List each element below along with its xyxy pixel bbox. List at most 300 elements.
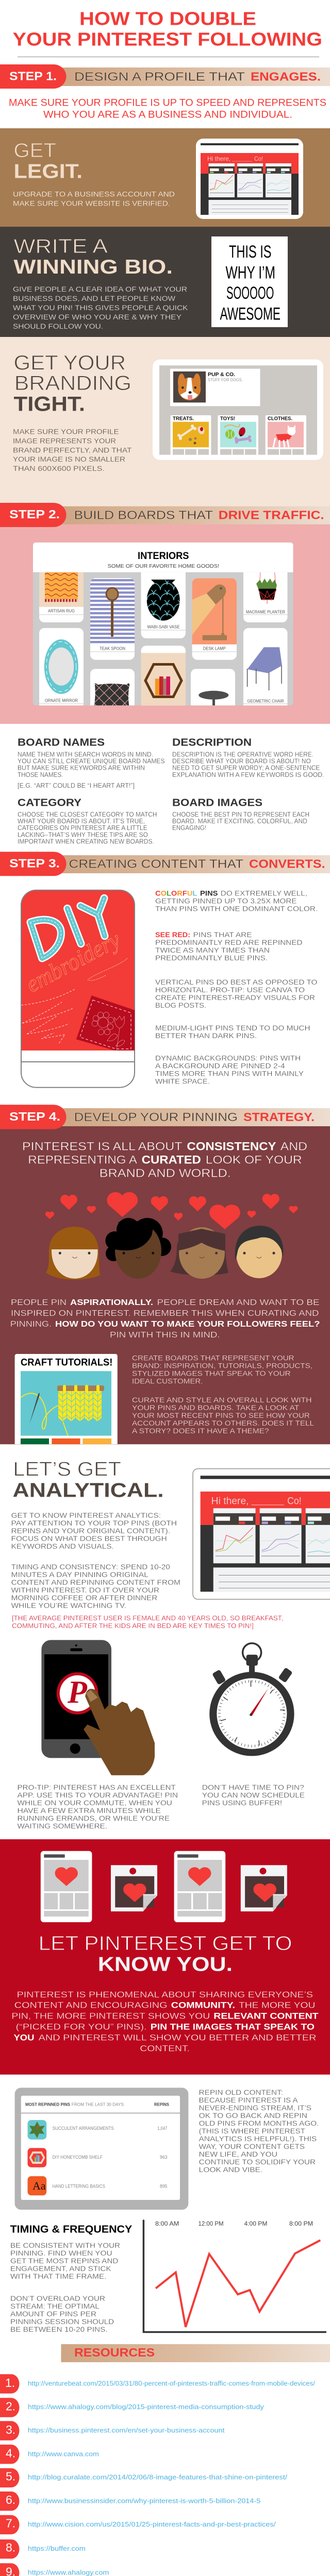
text block: board images: BOARD IMAGES	[172, 797, 262, 808]
text: pin aspirationally	[10, 1298, 320, 1340]
tablet: most repinned pins table: REPINS	[154, 2102, 169, 2107]
text: bio body: SHOULD FOLLOW YOU.	[13, 322, 103, 330]
text: pin tips	[155, 889, 318, 1085]
board mockup: interiors: SOME OF OUR FAVORITE HOME GOODS!	[108, 563, 219, 569]
icon: pinned note 1	[111, 1865, 157, 1911]
pin: stool	[191, 669, 235, 706]
poster: this is why i'm sooooo awesome: THIS IS	[229, 242, 271, 262]
board: clothes: CLOTHES.	[268, 416, 292, 422]
poster: this is why i'm sooooo awesome: WHY I’M	[226, 263, 275, 282]
tablet: most repinned pins table: FROM THE LAST 30 DAYS	[72, 2102, 124, 2107]
row: diy honeycomb shelf	[28, 2148, 167, 2167]
text: create boards	[132, 1354, 312, 1385]
text: red note: COMMUTING, AND AFTER THE KIDS ARE IN BED ARE KEY TIMES TO PIN!]	[12, 1622, 254, 1630]
text: get legit body: UPGRADE TO A BUSINESS ACCOUNT AND	[13, 190, 175, 198]
heading: let pinterest get to know you: KNOW YOU.	[98, 1954, 233, 1976]
resource 3	[0, 2421, 225, 2441]
text: consistency statement: CURATED	[142, 1154, 201, 1166]
step 1 intro text	[9, 97, 326, 121]
resource 7: http://www.cision.com/us/2015/01/25-pinterest-facts-and-pr-best-practices/	[28, 2521, 276, 2528]
tip: see red: SEE RED:	[155, 930, 190, 939]
panel: interiors board background	[0, 524, 330, 731]
board: toys: TOYS!	[220, 416, 235, 422]
text: timing and consistency: CONTENT AND REPINNING CONTENT FROM	[11, 1578, 180, 1586]
row: hand lettering basics: Aa	[32, 2179, 46, 2192]
heading: let's get analytical: ANALYTICAL.	[12, 1479, 164, 1501]
text: bio body: BUSINESS DOES, AND LET PEOPLE KNOW	[13, 294, 176, 302]
text: community paragraph	[11, 1990, 319, 2053]
resources banner: RESOURCES	[74, 2346, 155, 2359]
board mockup: interiors	[33, 543, 293, 706]
icon: tablet with heart 2	[174, 1851, 225, 1922]
resource 4: http://www.canva.com	[28, 2450, 99, 2458]
tip: see red: PINS THAT ARE	[193, 930, 252, 939]
step 3 banner: CONVERTS.	[249, 857, 325, 871]
text: red note	[12, 1614, 283, 1630]
pin: ornate mirror: ORNATE MIRROR	[45, 698, 78, 703]
text: repin old content	[199, 2088, 319, 2174]
text block: board names: YOU CAN STILL CREATE UNIQUE BOARD NAMES	[18, 757, 165, 765]
pin: macrame planter	[243, 572, 288, 622]
text: pro-tip	[18, 1783, 178, 1830]
step 2 banner: DRIVE TRAFFIC.	[219, 508, 324, 521]
text block: category: WHAT YOUR BOARD IS ABOUT. IT’S TRUE,	[18, 818, 145, 825]
text block: board names: THOSE NAMES.	[18, 771, 63, 778]
resource 5: http://blog.curalate.com/2014/02/06/8-image-features-that-shine-on-pinterest/	[28, 2473, 288, 2481]
text: consistency statement: REPRESENTING A	[28, 1154, 137, 1166]
resource 3: 3.	[6, 2423, 15, 2436]
text: community paragraph: PIN THE IMAGES THAT SPEAK TO	[151, 2022, 315, 2031]
step 4 banner: STRATEGY.	[243, 1110, 315, 1124]
text: analytics	[11, 1511, 177, 1550]
text: community paragraph: CONTENT.	[140, 2043, 190, 2053]
text: consistency statement: LOOK OF YOUR	[206, 1154, 302, 1166]
heading: winning bio: WINNING BIO.	[13, 256, 173, 278]
text: pro-tip: PRO-TIP: PINTEREST HAS AN EXCELLENT	[18, 1783, 176, 1791]
text block: category	[18, 797, 157, 845]
tip: dynamic backgrounds: DYNAMIC BACKGROUNDS: PINS WITH	[155, 1054, 301, 1062]
resource 2	[0, 2398, 265, 2417]
pin: macrame planter: MACRAME PLANTER	[246, 609, 285, 614]
text: repin old content: (THIS IS WHERE PINTEREST	[199, 2127, 305, 2135]
text: repin old content: NEW LIFE, AND YOU	[199, 2150, 277, 2158]
tablet: most repinned pins table	[15, 2088, 188, 2210]
text: pro-tip: WAITING SOMEWHERE.	[18, 1822, 107, 1830]
tip: colorful pins	[155, 889, 318, 913]
icon: large analytics dashboard: Hi there,	[211, 1495, 249, 1506]
resource 8	[0, 2539, 86, 2558]
title: YOUR PINTEREST FOLLOWING	[12, 28, 322, 49]
tip: colorful pins: COLORFUL	[155, 889, 197, 897]
text: get legit body: MAKE SURE YOUR WEBSITE IS VERIFIED.	[13, 199, 170, 207]
text block: board names: BOARD NAMES	[18, 737, 105, 749]
tip: colorful pins: DO EXTREMELY WELL,	[221, 889, 307, 897]
icon: analytics dashboard tablet: Co!	[254, 155, 263, 162]
text: pro-tip: HAVE A FEW EXTRA MINUTES WHILE	[18, 1806, 161, 1815]
pin: ornate mirror	[39, 628, 84, 711]
stitched word embroidery: embroidery	[22, 926, 125, 997]
tip: medium-light pins: MEDIUM-LIGHT PINS TEND TO DO MUCH	[155, 1024, 310, 1032]
text: community paragraph: PINTEREST IS PHENOMENAL ABOUT SHARING EVERYONE’S	[17, 1990, 313, 1999]
text: create boards: BRAND: INSPIRATION, TUTORIALS, PRODUCTS,	[132, 1362, 312, 1370]
text: consistency statement: CONSISTENCY	[187, 1140, 276, 1153]
text: repin old content: WAY, YOUR CONTENT GETS	[199, 2142, 305, 2150]
text: pin aspirationally: PIN WITH THIS IN MIND.	[110, 1331, 220, 1340]
text: pro-tip: RUNNING ERRANDS, OR WHILE YOU’RE	[18, 1814, 170, 1822]
text: branding body: THAN 600X600 PIXELS.	[13, 464, 105, 472]
text: community paragraph: YOU	[13, 2032, 34, 2042]
text block: timing & frequency: GET THE MOST REPINS AND	[10, 2257, 118, 2265]
text block: board images: ENGAGING!	[172, 824, 206, 832]
tip: see red: PREDOMINANTLY BLUE PINS.	[155, 954, 268, 962]
title: HOW TO DOUBLE	[79, 8, 256, 29]
row: succulent arrangements	[28, 2120, 167, 2140]
text block: timing & frequency: PINNING. FIND WHEN YOU	[10, 2249, 112, 2257]
text: repin old content: BECAUSE PINTEREST IS A	[199, 2096, 298, 2104]
line chart: repins by time of day	[143, 2220, 325, 2332]
text: consistency statement: AND	[280, 1140, 307, 1153]
resource 5	[0, 2468, 288, 2487]
tip: medium-light pins	[155, 1024, 310, 1040]
heading: let pinterest get to know you: LET PINTEREST GET TO	[39, 1933, 292, 1955]
heading: branding: TIGHT.	[13, 393, 85, 415]
tip: vertical pins: CREATE PINTEREST-READY VISUALS FOR	[155, 993, 315, 1002]
pin: teak spoon	[90, 578, 135, 660]
step 2 banner: STEP 2.	[9, 507, 60, 521]
text: timing and consistency: MINUTES A DAY PINNING ORIGINAL	[11, 1570, 148, 1579]
icon: tablet with heart 1	[41, 1851, 92, 1922]
icon: dog face	[178, 374, 201, 400]
pin: artisan rug	[39, 572, 84, 622]
resource 7	[0, 2515, 276, 2534]
text: community paragraph: (“PICKED FOR YOU” PINS).	[16, 2022, 146, 2031]
tip: see red: PREDOMINANTLY RED ARE REPINNED	[155, 938, 302, 946]
text: community paragraph: PIN, THE MORE PINTEREST SHOWS YOU	[11, 2011, 210, 2021]
heading: get legit: LEGIT.	[13, 161, 82, 183]
pin: artisan rug: ARTISAN RUG	[48, 608, 75, 614]
step 1 intro text: MAKE SURE YOUR PROFILE IS UP TO SPEED AND REPRESENTS	[9, 97, 326, 109]
row: diy honeycomb shelf: 963	[160, 2155, 167, 2160]
text: analytics: GET TO KNOW PINTEREST ANALYTICS:	[11, 1511, 161, 1519]
card: craft tutorials	[15, 1354, 118, 1444]
row: hand lettering basics: HAND LETTERING BASICS	[53, 2184, 105, 2189]
resource 2: 2.	[6, 2399, 15, 2413]
resource 4: 4.	[6, 2446, 15, 2460]
text block: board names: NAME THEM WITH SEARCH WORDS IN MIND.	[18, 751, 153, 758]
text block: board images	[172, 797, 309, 832]
tip: vertical pins: HORIZONTAL. PRO-TIP: USE CANVA TO	[155, 986, 305, 994]
text: pin aspirationally: PEOPLE DREAM AND WANT TO BE	[157, 1298, 320, 1307]
step 3 banner	[0, 852, 330, 876]
text: timing and consistency: WHILE YOU’RE WATCHING TV.	[11, 1601, 126, 1609]
icon: face 4	[235, 1226, 283, 1278]
text block: category: CATEGORY	[18, 797, 82, 808]
text: branding body	[13, 428, 132, 472]
board: treats: TREATS.	[173, 416, 194, 422]
tip: colorful pins: THAN PINS WITH ONE DOMINANT COLOR.	[155, 905, 318, 913]
resource 2: https://www.ahalogy.com/blog/2015-pinterest-media-consumption-study	[28, 2403, 265, 2411]
icon: stopwatch	[209, 1643, 294, 1756]
resource 8: 8.	[6, 2541, 15, 2554]
icon: analytics dashboard tablet: Hi there,	[207, 155, 230, 162]
tip: dynamic backgrounds	[155, 1054, 304, 1085]
icon: large analytics dashboard: Co!	[287, 1495, 302, 1506]
text block: timing & frequency	[10, 2224, 133, 2333]
text: buffer tip: YOU CAN NOW SCHEDULE	[202, 1791, 305, 1799]
text block: description: DESCRIPTION	[172, 737, 252, 749]
step 4 banner: DEVELOP YOUR PINNING	[74, 1110, 238, 1124]
panel: write a winning bio	[0, 227, 330, 337]
text: buffer tip: PINS USING BUFFER!	[202, 1799, 282, 1807]
text block: board names: BUT MAKE SURE KEYWORDS ARE WITHIN	[18, 765, 145, 772]
text: repin old content: OLD PINS FROM MONTHS AGO.	[199, 2119, 319, 2127]
step 1 banner: ENGAGES.	[251, 70, 321, 83]
mockup: pinterest profile pup & co: PUP & CO.	[208, 372, 235, 378]
text: pin aspirationally: PINNING.	[10, 1320, 52, 1329]
text block: timing & frequency: BE BETWEEN 10-20 PINS.	[10, 2325, 108, 2333]
row: hand lettering basics	[28, 2176, 167, 2195]
pin: wabi-sabi vase: WABI-SABI VASE	[147, 624, 180, 629]
resource 6: http://www.businessinsider.com/why-pinterest-is-worth-5-billion-2014-5	[28, 2497, 260, 2504]
heading: get legit	[13, 140, 82, 183]
panel: let pinterest get to know you	[0, 1839, 330, 2075]
title	[12, 8, 322, 49]
text block: board names: [E.G. “ART” COULD BE “I HEART ART!”]	[18, 782, 135, 789]
dark red patch with stitched flower	[76, 995, 135, 1050]
line chart: repins by time of day: 12:00 PM	[198, 2220, 224, 2227]
board: clothes	[266, 415, 306, 455]
pin: honeycomb shelf	[141, 646, 186, 706]
text: buffer tip	[202, 1783, 305, 1807]
pin: desk lamp	[192, 578, 237, 660]
text: analytics: FOCUS ON WHAT DOES BEST THROUGH	[11, 1534, 167, 1543]
line chart: repins by time of day: 4:00 PM	[244, 2220, 267, 2227]
tip: see red: TWICE AS MANY TIMES THAN	[155, 946, 270, 954]
text: timing and consistency: MORNING COFFEE OR AFTER DINNER	[11, 1594, 157, 1602]
resource 8: https://buffer.com	[28, 2545, 86, 2552]
text block: timing & frequency: DON’T OVERLOAD YOUR	[10, 2294, 105, 2302]
pin: geometric chair	[243, 628, 288, 711]
row: succulent arrangements: 1,047	[157, 2126, 167, 2131]
resource 6: 6.	[6, 2493, 15, 2506]
resource 1: http://venturebeat.com/2015/03/31/80-percent-of-pinterests-traffic-comes-from-mobile-devices/	[28, 2380, 316, 2387]
poster: this is why i'm sooooo awesome: SOOOOO	[226, 283, 274, 303]
poster: this is why i'm sooooo awesome: AWESOME	[220, 304, 280, 324]
heading: let's get analytical	[12, 1458, 164, 1501]
text: create boards: STYLIZED IMAGES THAT SPEAK TO YOUR	[132, 1369, 291, 1378]
text: community paragraph: THE MORE YOU	[239, 2000, 315, 2010]
text: consistency statement: BRAND AND WORLD.	[100, 1167, 231, 1180]
text: community paragraph: COMMUNITY.	[171, 2000, 235, 2010]
tip: medium-light pins: BETTER THAN DARK PINS.	[155, 1031, 257, 1040]
text: buffer tip: DON’T HAVE TIME TO PIN?	[202, 1783, 304, 1791]
text: timing and consistency	[11, 1563, 180, 1609]
text: branding body: IMAGE REPRESENTS YOUR	[13, 437, 116, 445]
poster: this is why i'm sooooo awesome	[211, 236, 288, 327]
text: curate and style: CURATE AND STYLE AN OVERALL LOOK WITH	[132, 1396, 311, 1404]
text: community paragraph: RELEVANT CONTENT	[213, 2011, 319, 2021]
line chart: repins by time of day: 8:00 AM	[155, 2220, 179, 2227]
heading: winning bio	[13, 235, 173, 278]
icon: face 2	[105, 1218, 171, 1279]
text block: timing & frequency: AMOUNT OF PINS PER	[10, 2310, 96, 2318]
text: consistency statement	[22, 1140, 307, 1180]
text: analytics: REPINS AND YOUR ORIGINAL CONTENT).	[11, 1527, 170, 1535]
resource 9	[0, 2563, 109, 2576]
resource 1: 1.	[5, 2376, 15, 2389]
text block: timing & frequency: WITH THAT TIME FRAME.	[10, 2272, 106, 2280]
text block: description: EXPLANATION WITH A FEW KEYWORDS IS GOOD.	[172, 771, 324, 778]
tip: dynamic backgrounds: A BACKGROUND ARE PINNED 2-4	[155, 1061, 285, 1070]
text block: timing & frequency: BE CONSISTENT WITH YOUR	[10, 2241, 120, 2249]
text: branding body: BRAND PERFECTLY, AND THAT	[13, 446, 132, 454]
text block: description: DESCRIBE WHAT YOUR BOARD IS ABOUT! NO	[172, 757, 311, 765]
stitched letters diy	[30, 898, 105, 958]
resource 1	[0, 2374, 316, 2394]
pin: desk lamp: DESK LAMP	[203, 646, 226, 651]
tip: colorful pins: GETTING PINNED UP TO 3.25X MORE	[155, 896, 297, 905]
text: red note: [THE AVERAGE PINTEREST USER IS FEMALE AND 40 YEARS OLD, SO BREAKFAST,	[12, 1614, 283, 1622]
tip: dynamic backgrounds: WHITE SPACE.	[155, 1077, 210, 1085]
resource 7: 7.	[6, 2517, 15, 2530]
icon: large analytics dashboard	[193, 1469, 330, 1599]
line chart: repins by time of day: 8:00 PM	[289, 2220, 313, 2227]
dashed thread lines	[21, 989, 75, 1044]
tip: vertical pins: VERTICAL PINS DO BEST AS OPPOSED TO	[155, 978, 318, 986]
icon: pinned note 2	[241, 1865, 287, 1911]
heading: branding: BRANDING	[14, 372, 131, 395]
heading: let's get analytical: LET’S GET	[13, 1458, 121, 1480]
step 1 banner: STEP 1.	[9, 70, 57, 83]
row: succulent arrangements: SUCCULENT ARRANGEMENTS	[53, 2126, 114, 2131]
icon: hearts	[45, 1192, 298, 1229]
icon: phone with pinterest logo and hand	[41, 1640, 155, 1775]
board mockup: interiors: INTERIORS	[138, 551, 189, 562]
text: timing and consistency: TIMING AND CONSISTENCY: SPEND 10-20	[11, 1563, 170, 1571]
heading: branding	[13, 351, 131, 415]
step 3 banner: CREATING CONTENT THAT	[69, 857, 243, 871]
text: repin old content: LOOK AND VIBE.	[199, 2165, 262, 2174]
text: bio body	[13, 285, 188, 330]
resource 4	[0, 2445, 99, 2464]
text block: description: NEED TO GET SUPER WORDY; A ONE-SENTENCE	[172, 765, 320, 772]
text: get legit body	[13, 190, 175, 207]
step 1 banner: DESIGN A PROFILE THAT	[74, 70, 245, 83]
text: pin aspirationally: ASPIRATIONALLY.	[70, 1298, 153, 1307]
tip: vertical pins: BLOG POSTS.	[155, 1001, 206, 1009]
board: toys	[218, 415, 258, 455]
text: branding body: YOUR IMAGE IS NO SMALLER	[13, 455, 125, 463]
text block: board images: BOARD. MAKE IT EXCITING, COLORFUL, AND	[172, 818, 307, 825]
text: pin aspirationally: PEOPLE PIN	[11, 1298, 67, 1307]
text: pro-tip: APP. USE THIS TO YOUR ADVANTAGE! PIN	[18, 1791, 178, 1799]
pin: teak spoon: TEAK SPOON	[100, 646, 125, 651]
text block: description: DESCRIPTION IS THE OPERATIVE WORD HERE.	[172, 751, 314, 758]
text: bio body: WHAT YOU PIN! THIS GIVES PEOPLE A QUICK	[13, 303, 188, 312]
resources list	[0, 2374, 316, 2576]
heading: branding: GET YOUR	[13, 351, 126, 374]
text block: category: LACKING–THAT’S WHY THESE TIPS ARE SO	[18, 831, 148, 838]
text: curate and style: YOUR PINS AND BOARDS. TAKE A LOOK AT	[132, 1403, 300, 1412]
text: bio body: OVERVIEW OF WHO YOU ARE & WHY THEY	[13, 313, 182, 321]
icon: analytics dashboard tablet	[196, 139, 303, 219]
tip: vertical pins	[155, 978, 318, 1009]
step 2 banner: BUILD BOARDS THAT	[74, 508, 213, 521]
panel: get legit	[0, 128, 330, 227]
heading: get legit: GET	[13, 140, 56, 162]
text: pin aspirationally: INSPIRED ON PINTEREST. REMEMBER THIS WHEN CURATING AND	[11, 1309, 319, 1318]
text: pin aspirationally: HOW DO YOU WANT TO MAKE YOUR FOLLOWERS FEEL?	[55, 1320, 320, 1329]
panel: get your branding tight	[0, 337, 330, 524]
board: treats	[171, 415, 211, 455]
icon: face 1	[46, 1227, 100, 1280]
text: analytics: PAY ATTENTION TO YOUR TOP PINS (BOTH	[11, 1519, 177, 1527]
mockup: pinterest profile pup & co	[153, 360, 323, 460]
panel: step 4 maroon	[0, 1126, 330, 1444]
pin card: diy embroidery	[21, 890, 135, 1088]
icon: face 3	[170, 1227, 228, 1279]
text: pro-tip: WHILE ON YOUR COMMUTE, WHEN YOU	[18, 1799, 172, 1807]
resource 6	[0, 2492, 260, 2511]
step 1 banner	[0, 64, 330, 89]
text block: timing & frequency: PINNING SESSION SHOULD	[10, 2317, 114, 2326]
text block: category: CHOOSE THE CLOSEST CATEGORY TO MATCH	[18, 811, 157, 818]
text: repin old content: ANALYTICS IS HELPFUL!). THIS	[199, 2134, 317, 2143]
text block: category: CATEGORIES ON PINTEREST ARE A LITTLE	[18, 824, 147, 832]
text: analytics: KEYWORDS AND VISUALS.	[11, 1542, 114, 1550]
text: repin old content: CONTINUE TO SOLIDIFY YOUR	[199, 2158, 316, 2166]
pin: wabi-sabi vase	[141, 572, 186, 638]
text: timing and consistency: WITHIN PINTEREST. DO IT OVER YOUR	[11, 1586, 159, 1594]
text: community paragraph: CONTENT AND ENCOURAGING	[14, 2000, 168, 2010]
card: craft tutorials: CRAFT TUTORIALS!	[21, 1358, 112, 1368]
mockup: pinterest profile pup & co: STUFF FOR DOGS.	[208, 378, 243, 382]
text: curate and style	[132, 1396, 314, 1435]
text block: category: IMPORTANT WHEN CREATING NEW BOARDS.	[18, 838, 154, 845]
pin: geometric chair: GEOMETRIC CHAIR	[248, 698, 284, 703]
step 3 banner: STEP 3.	[9, 856, 60, 870]
tip: colorful pins: PINS	[200, 889, 218, 897]
text: repin old content: OK TO GO BACK AND REPIN	[199, 2111, 307, 2120]
resource 5: 5.	[6, 2469, 15, 2483]
tip: see red	[155, 930, 302, 962]
row: hand lettering basics: 895	[160, 2184, 167, 2189]
text block: timing & frequency: ENGAGEMENT, AND STICK	[10, 2264, 111, 2273]
text: curate and style: A STORY? DOES IT HAVE A THEME?	[132, 1427, 269, 1435]
row: diy honeycomb shelf: DIY HONEYCOMB SHELF	[53, 2155, 103, 2160]
text: curate and style: YOUR MOST RECENT PINS TO SEE HOW YOUR	[132, 1411, 310, 1419]
text: branding body: MAKE SURE YOUR PROFILE	[13, 428, 119, 436]
heading: winning bio: WRITE A	[13, 235, 108, 258]
text: repin old content: NEVER-ENDING STREAM, IT’S	[199, 2104, 311, 2112]
text block: board names	[18, 737, 165, 789]
tablet: most repinned pins table: MOST REPINNED PINS	[25, 2102, 70, 2107]
resources banner	[61, 2344, 330, 2362]
text block: timing & frequency: STREAM: THE OPTIMAL	[10, 2302, 100, 2310]
step 2 banner	[0, 503, 330, 527]
step 4 banner	[0, 1105, 330, 1129]
tip: dynamic backgrounds: TIMES MORE THAN PINS WITH MAINLY	[155, 1069, 304, 1077]
resource 3: https://business.pinterest.com/en/set-your-business-account	[28, 2427, 225, 2434]
heading: let pinterest get to know you	[39, 1933, 292, 1976]
text block: board images: CHOOSE THE BEST PIN TO REPRESENT EACH	[172, 811, 309, 818]
text: curate and style: ACCOUNT APPEARS TO OTHERS. DOES IT TELL	[132, 1419, 314, 1427]
text block: description	[172, 737, 324, 778]
text: create boards: CREATE BOARDS THAT REPRESENT YOUR	[132, 1354, 294, 1362]
icon: phone with pinterest logo and hand: P	[67, 1675, 88, 1710]
text: create boards: IDEAL CUSTOMER.	[132, 1377, 203, 1385]
pin: pillow	[90, 669, 135, 706]
